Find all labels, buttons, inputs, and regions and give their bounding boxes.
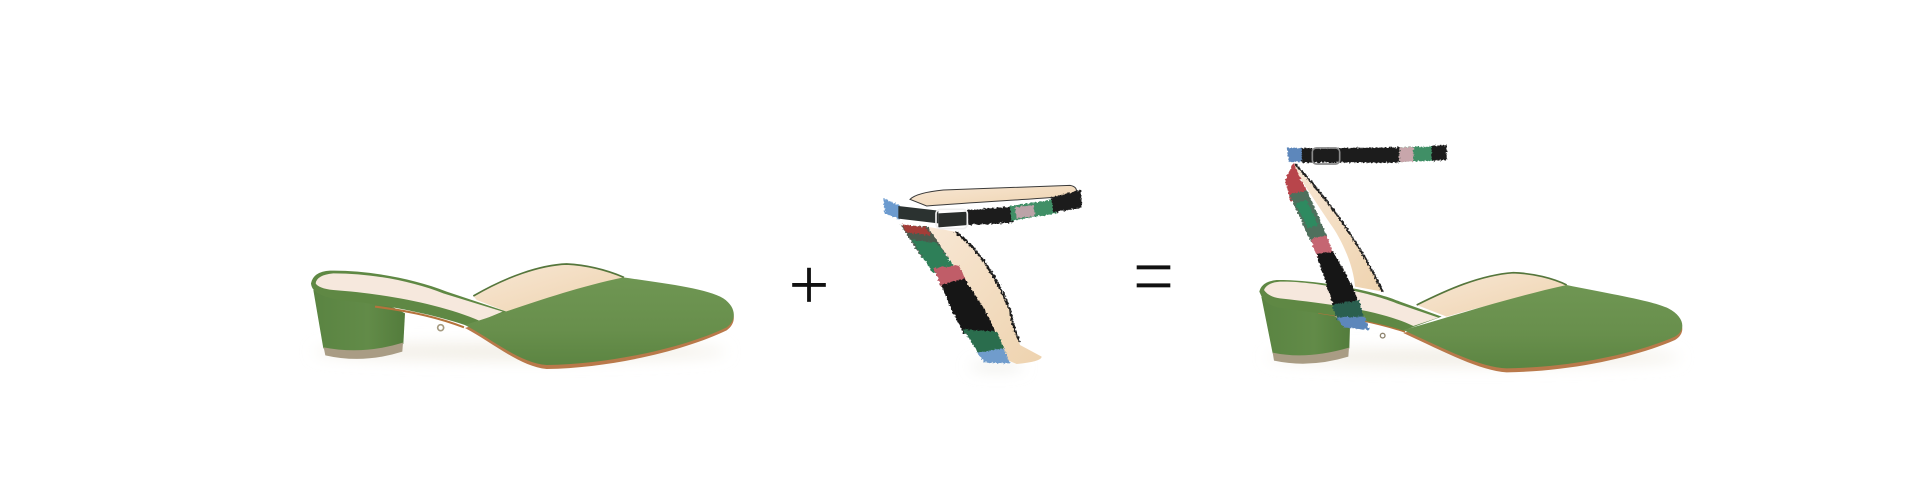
shadow <box>313 344 727 360</box>
sole <box>465 280 734 369</box>
product: green mule <box>311 264 734 369</box>
shadow <box>1267 349 1680 365</box>
heel cap <box>324 343 403 359</box>
vamp <box>465 277 734 365</box>
insole <box>316 273 503 321</box>
sole <box>1403 288 1682 372</box>
lining <box>473 264 624 312</box>
heel cap <box>1273 348 1349 364</box>
diagonal strap <box>901 224 1010 363</box>
diagonal strap <box>1285 163 1369 330</box>
instep edge <box>1295 164 1383 292</box>
equals sign: = <box>1132 236 1175 316</box>
product: assembled slingback <box>1259 145 1682 372</box>
product: detachable strap <box>883 185 1082 370</box>
heel <box>313 290 405 352</box>
plus sign: + <box>788 245 830 325</box>
ankle band <box>1287 145 1447 163</box>
instep lining <box>1293 164 1383 292</box>
collar <box>311 271 507 326</box>
leather keeper <box>898 206 938 223</box>
buckle <box>936 209 968 229</box>
strap back lining <box>910 185 1077 206</box>
vamp <box>1403 285 1682 368</box>
ankle band <box>883 190 1082 225</box>
instep edge <box>955 232 1019 342</box>
instep lining <box>927 227 1042 364</box>
hook <box>1380 333 1385 338</box>
hook <box>438 325 444 331</box>
shank <box>375 307 464 327</box>
collar <box>1259 280 1442 331</box>
lining top edge <box>1417 273 1567 305</box>
insole <box>1264 282 1438 326</box>
lining top edge <box>473 264 624 296</box>
shank <box>1318 313 1405 332</box>
shadow <box>970 363 1023 370</box>
lining <box>1417 273 1567 317</box>
buckle <box>1312 148 1340 164</box>
heel <box>1261 297 1350 356</box>
